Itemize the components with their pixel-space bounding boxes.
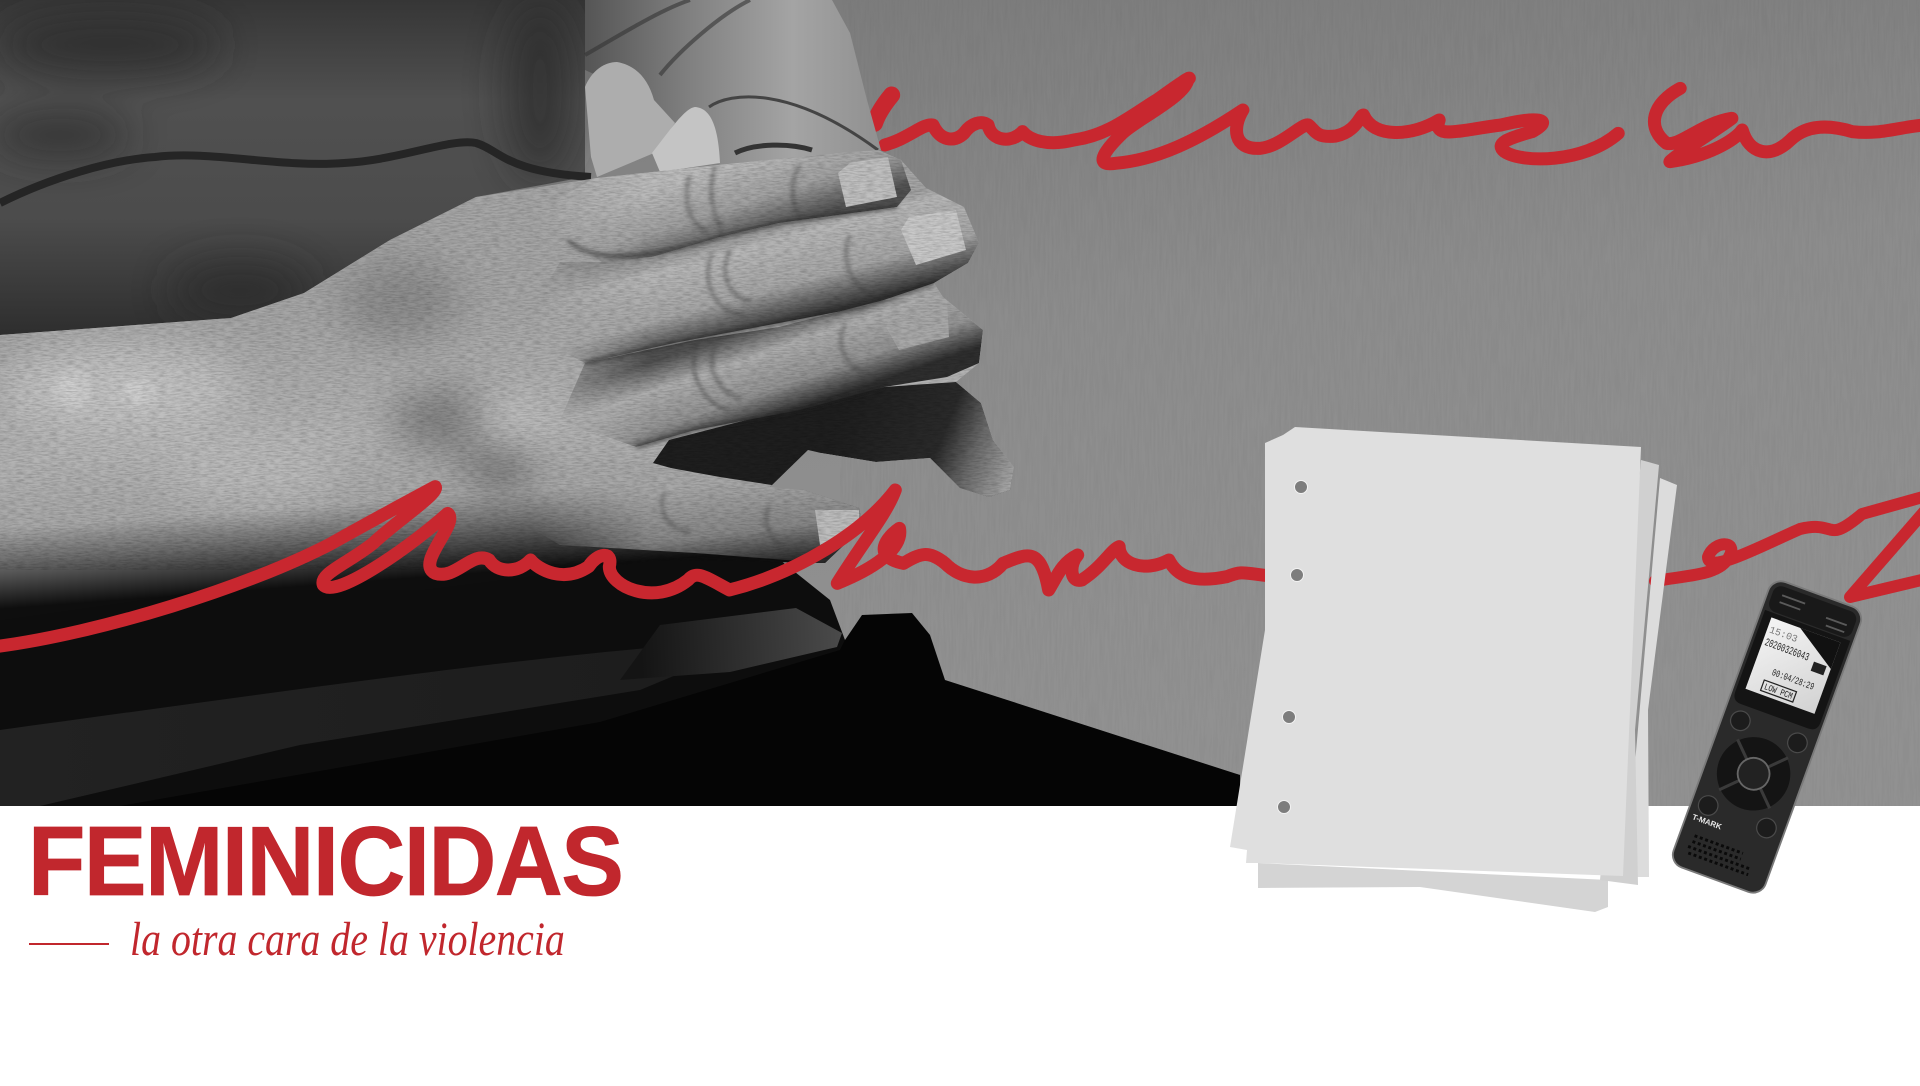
directional pad — [1707, 727, 1801, 821]
knuckle wrinkles — [662, 165, 870, 548]
lower red scribble across hand — [0, 487, 1277, 647]
arm and back of hand — [0, 140, 1030, 630]
pale skin marks — [58, 374, 150, 406]
title: FEMINICIDAS — [28, 806, 622, 916]
right back sheet — [1625, 478, 1677, 877]
fingers group faded into hand — [500, 150, 983, 563]
upper red scribble — [874, 78, 1920, 164]
brand label: T-MARK — [1691, 812, 1723, 832]
recorder body — [1669, 578, 1865, 896]
lower clothing base — [0, 560, 1240, 806]
digital voice recorder — [1669, 578, 1865, 896]
shirt shadows — [0, 0, 575, 320]
bottom sheet — [1258, 863, 1608, 912]
right middle sheet — [1600, 460, 1659, 885]
hand shading — [0, 260, 545, 500]
front sheet — [1230, 427, 1641, 876]
lower fold — [0, 640, 760, 806]
grey wall background — [0, 0, 1920, 806]
screen readout: 15:03 — [1768, 625, 1799, 645]
cuff arc — [709, 97, 878, 150]
subtitle text: la otra cara de la violencia — [130, 913, 565, 966]
hidden fingertip — [585, 62, 675, 177]
punched holes — [1278, 480, 1308, 814]
photo: seated person with clasped hands — [0, 0, 1240, 806]
finger-to-hand creases — [568, 207, 934, 447]
grey sleeve — [585, 0, 881, 165]
sleeve fold — [585, 0, 750, 75]
corner buttons — [1695, 708, 1810, 841]
cuff fold — [620, 608, 842, 680]
dark palm below fingers — [653, 382, 1014, 497]
black knee — [120, 613, 1240, 806]
shirt seam — [0, 142, 591, 203]
skin fibre texture — [0, 140, 1030, 570]
middle finger — [520, 188, 979, 363]
screen readout: 20200326043 — [1763, 637, 1811, 664]
speaker slots — [1777, 595, 1849, 632]
wall paper texture — [840, 0, 1920, 806]
stack of blank papers — [1230, 427, 1677, 912]
dark shirt — [0, 0, 585, 335]
screen — [1745, 617, 1840, 714]
speaker grille — [1686, 835, 1754, 875]
cuff crease — [735, 145, 812, 153]
hidden fingertip two — [652, 107, 720, 172]
thumb — [546, 468, 860, 563]
rule — [29, 943, 109, 945]
fingernails — [838, 157, 897, 207]
red scribble right of papers — [1655, 495, 1920, 597]
screen readout — [1749, 625, 1829, 708]
top panel — [1767, 584, 1859, 639]
screen dark corner — [1791, 628, 1840, 669]
screen readout: 00:04/28:29 — [1770, 667, 1816, 693]
screen bezel — [1732, 610, 1850, 732]
index finger — [540, 150, 911, 262]
screen low pcm frame — [1761, 680, 1797, 702]
ring finger — [560, 297, 983, 447]
screen readout: LOW PCM — [1763, 681, 1794, 702]
battery icon — [1811, 662, 1827, 675]
